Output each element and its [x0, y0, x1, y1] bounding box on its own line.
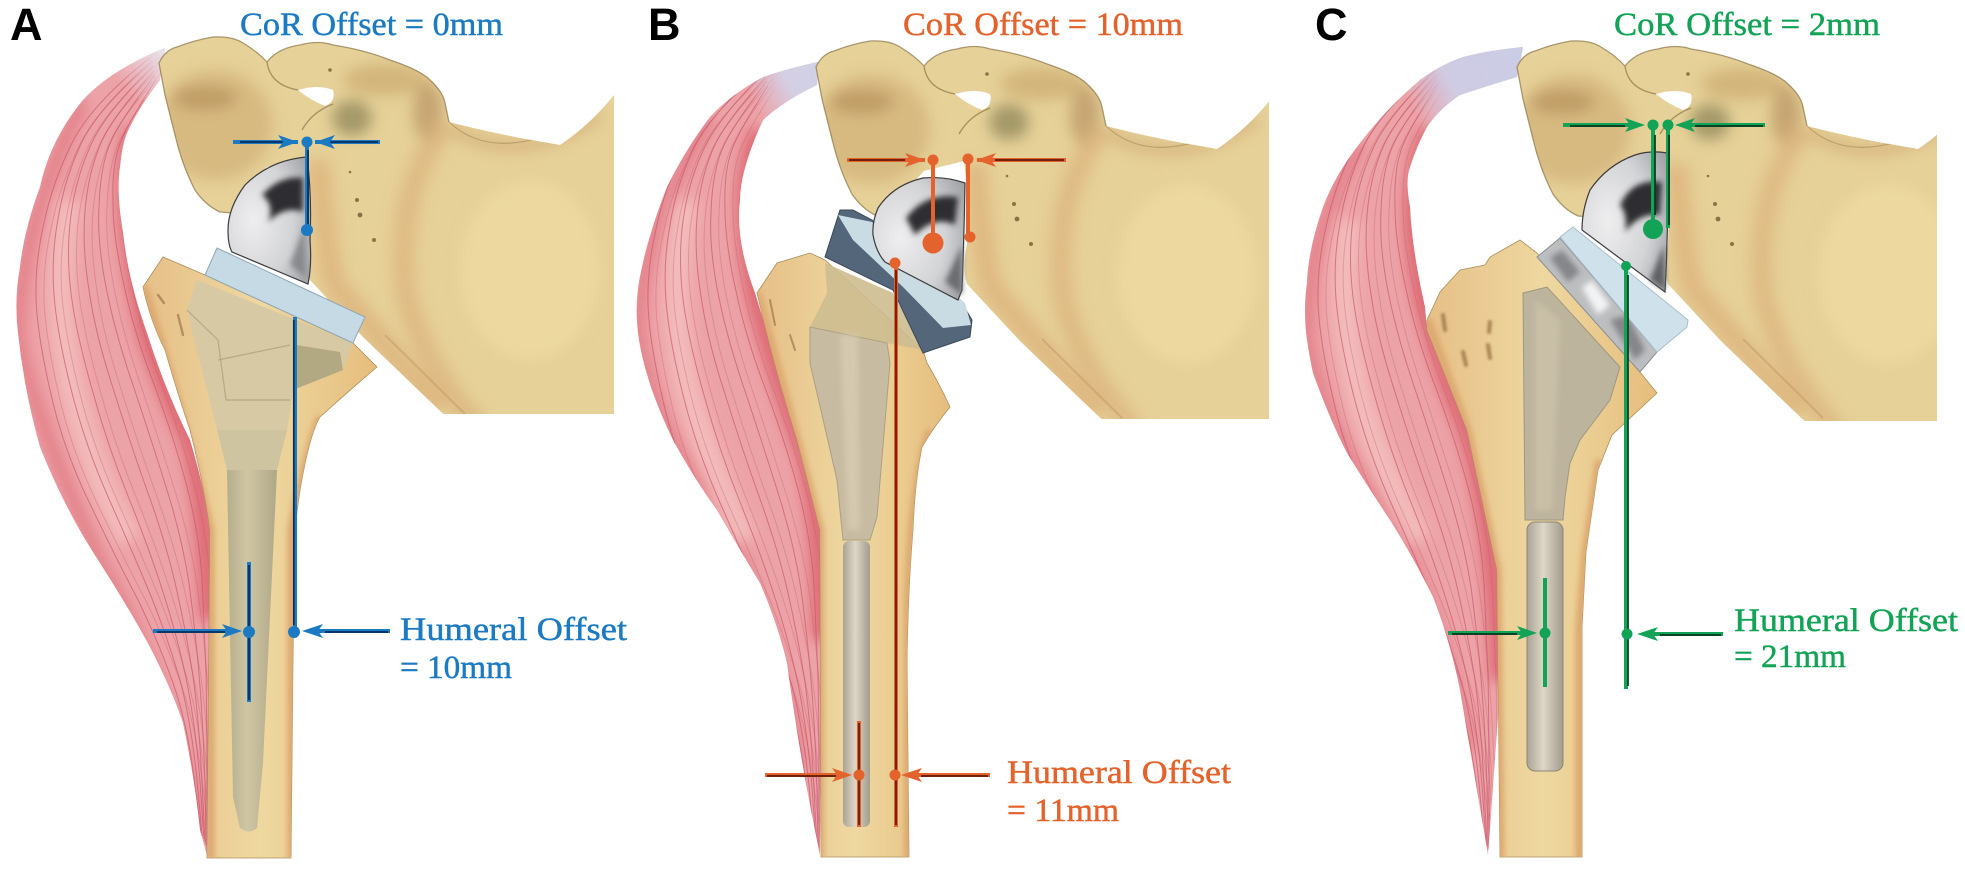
stem B: [810, 263, 923, 827]
humeral offset label B: = 11mm: [1007, 793, 1119, 829]
tray C: [1537, 227, 1688, 372]
tray B: [825, 210, 972, 353]
glenosphere head A: [228, 157, 311, 284]
humeral offset label A: = 10mm: [400, 650, 512, 686]
humerus B detail: [757, 293, 930, 860]
measurement lines C: [1448, 118, 1765, 689]
measurement lines B: [765, 153, 1066, 827]
panel A: zero CoR offset implant: [0, 0, 627, 870]
CoR offset label B: CoR Offset = 10mm: [903, 7, 1183, 43]
humerus B: [757, 253, 950, 857]
muscle B: [636, 62, 820, 854]
humeral offset label A: Humeral Offset: [400, 612, 627, 648]
panel label C: C: [1315, 0, 1348, 50]
humerus A: [143, 257, 377, 858]
humeral offset label C: Humeral Offset: [1734, 603, 1958, 639]
humerus C detail: [1427, 315, 1600, 860]
panel C: 2 mm CoR offset implant: [1290, 0, 1965, 870]
scapula C: [1515, 41, 1965, 434]
scapula B: [814, 41, 1271, 434]
humerus A shading: [143, 287, 320, 860]
stem A: [187, 280, 353, 832]
muscle A: [16, 48, 210, 856]
glenosphere head C: [1582, 152, 1668, 292]
CoR offset label A: CoR Offset = 0mm: [240, 7, 503, 43]
humeral offset label B: Humeral Offset: [1007, 755, 1231, 791]
panel label A: A: [10, 0, 42, 50]
humeral offset label C: = 21mm: [1734, 639, 1846, 675]
measurement lines A: [153, 135, 390, 702]
muscle C: [1305, 47, 1523, 855]
panel B: 10 mm CoR offset implant: [620, 0, 1271, 870]
glenosphere head B: [873, 178, 965, 300]
humerus C: [1427, 240, 1657, 857]
panel label B: B: [648, 0, 680, 50]
liner tray A: [205, 248, 365, 343]
stem C: [1523, 287, 1620, 771]
scapula A: [157, 37, 614, 430]
CoR offset label C: CoR Offset = 2mm: [1614, 7, 1880, 43]
